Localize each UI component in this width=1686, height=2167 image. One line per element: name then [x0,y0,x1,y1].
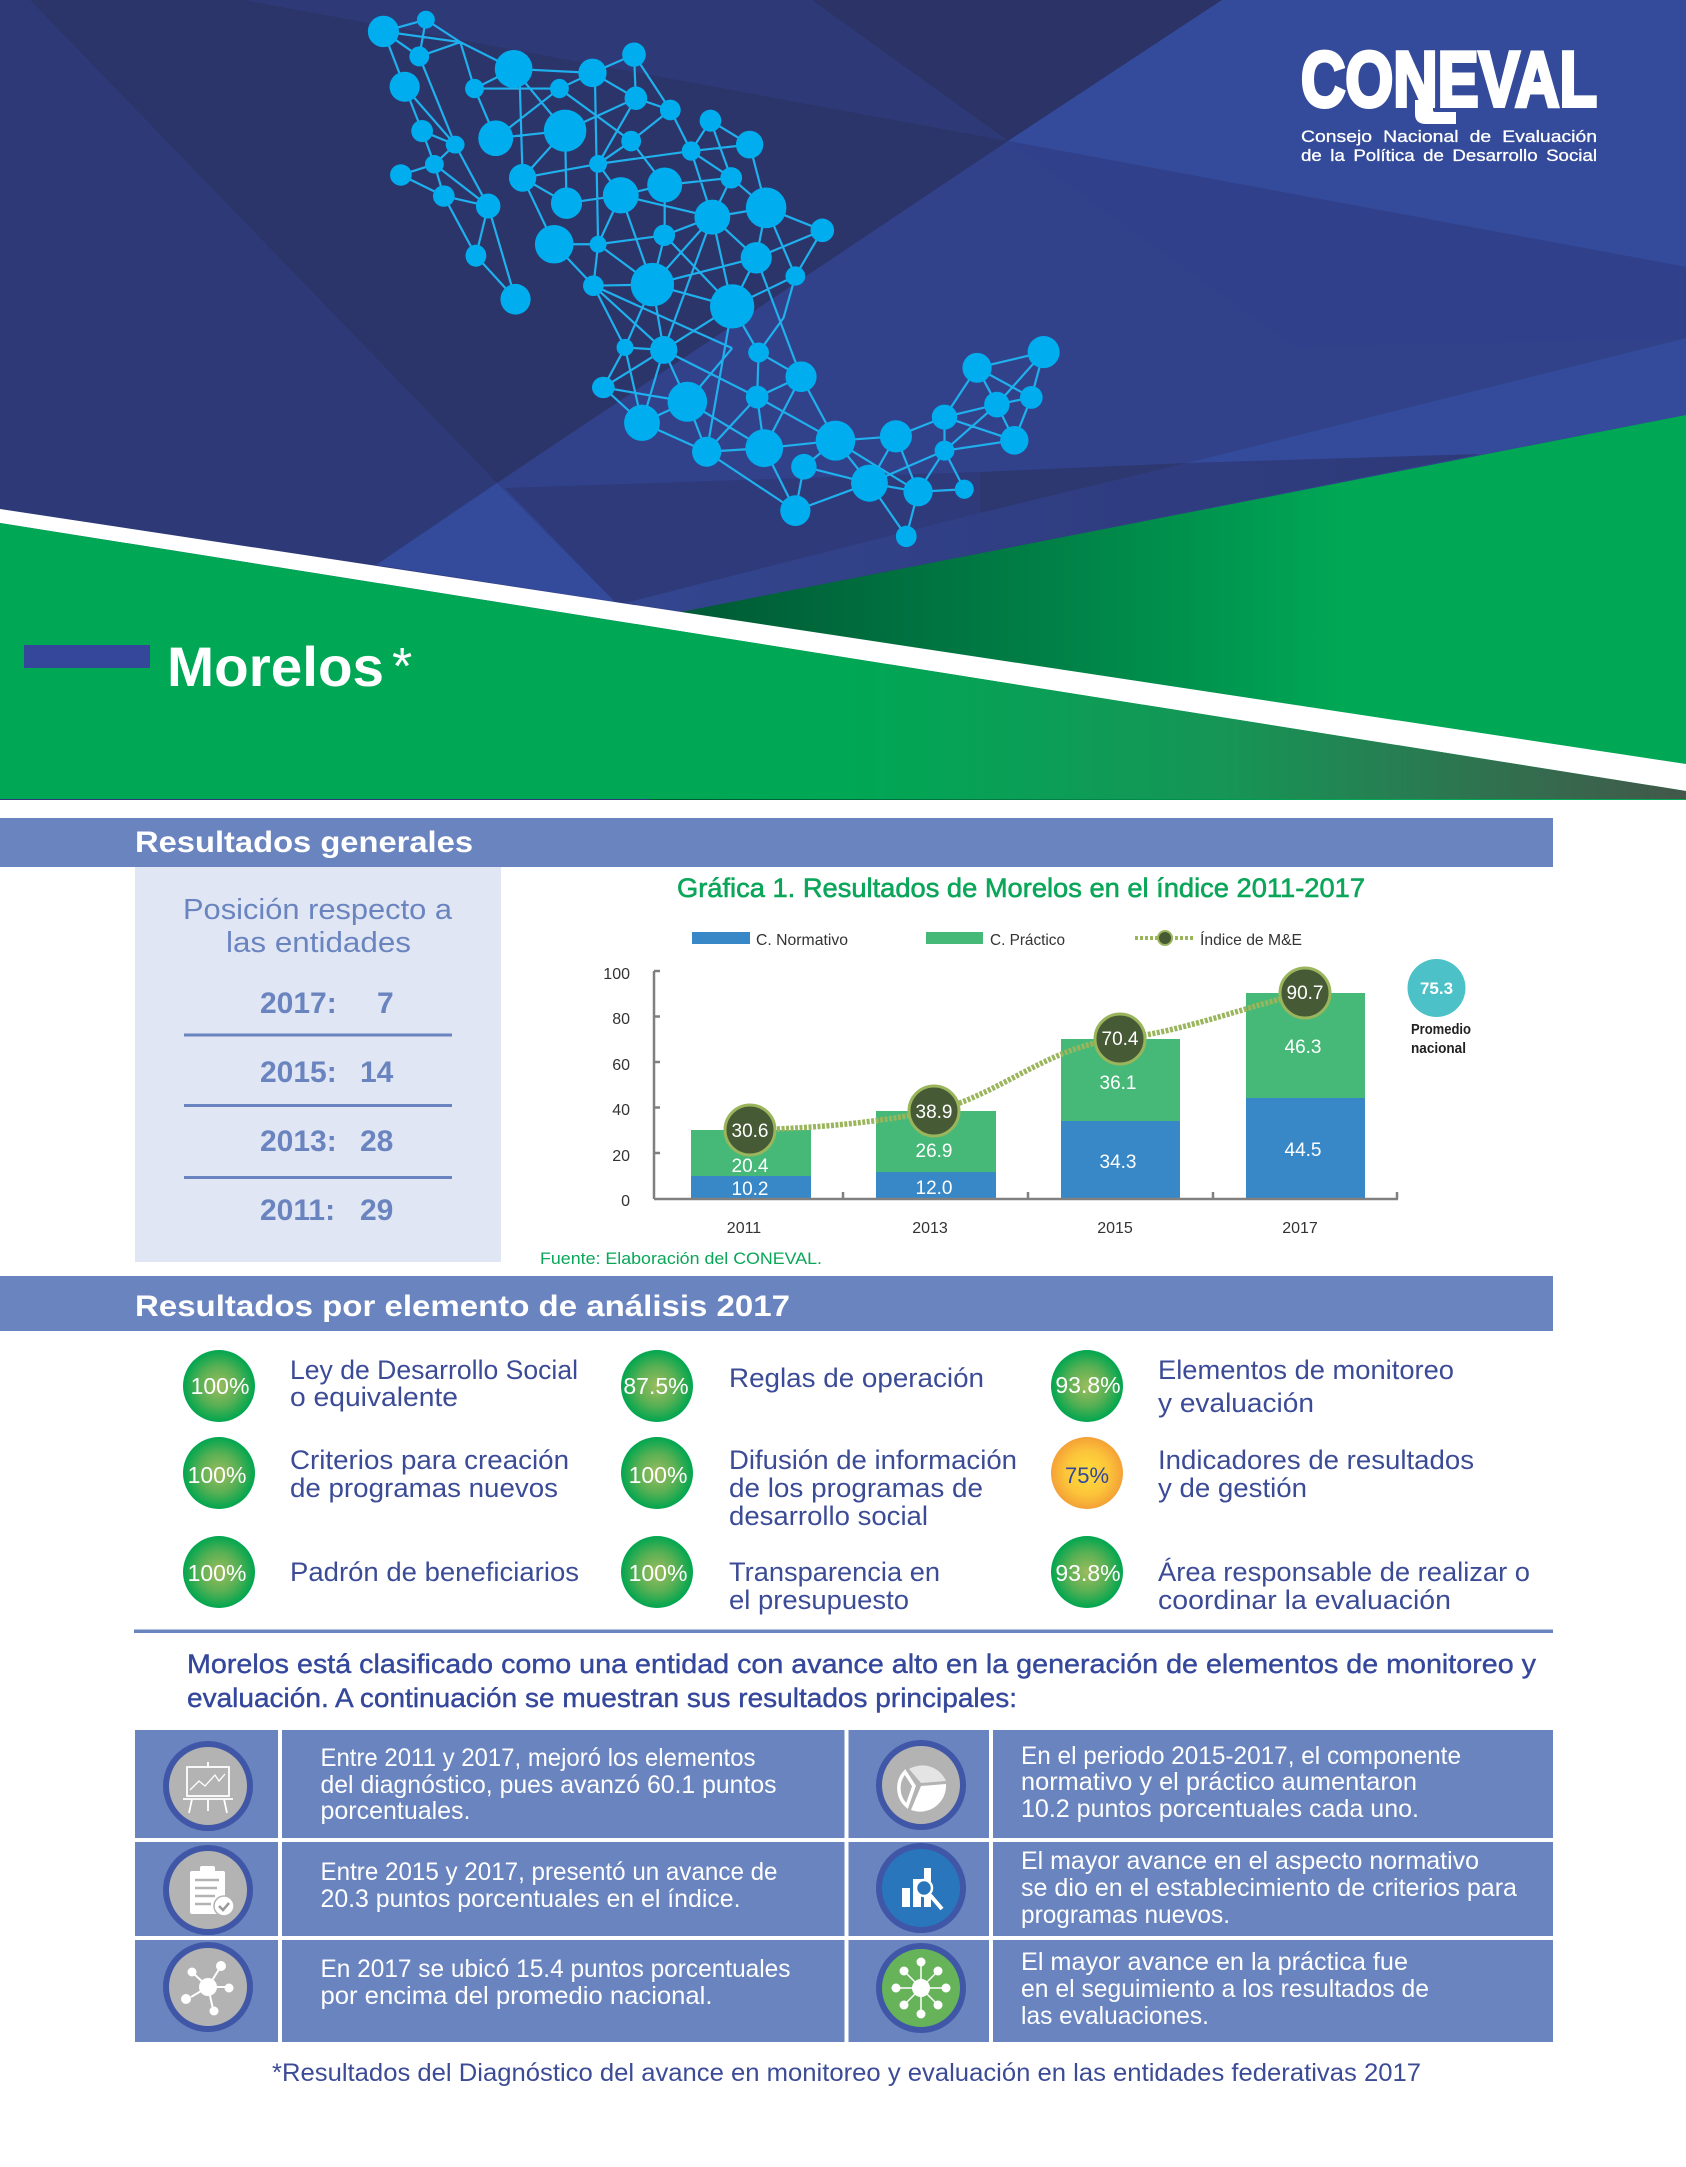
score badges: 93.8% [1055,1560,1121,1586]
chart: Resultados de Morelos 2011-2017 [540,873,1471,1268]
heading: Resultados generales [0,818,1553,867]
element labels: o equivalente [290,1382,458,1412]
score badges: 100% [629,1462,687,1488]
element labels: Transparencia en [729,1557,940,1587]
index values [732,983,1323,1142]
national average [1408,959,1471,1057]
stacked bars [691,993,1365,1198]
national average: Promedio [1411,1021,1471,1038]
CONEVAL logo [1301,35,1597,165]
source: Fuente: Elaboración del CONEVAL. [540,1249,822,1268]
bar values: 26.9 [916,1141,952,1162]
index values: 30.6 [732,1121,768,1142]
legend: C. Práctico [990,932,1065,949]
index markers [725,968,1330,1155]
CONEVAL logo: CONEVAL [1301,35,1597,123]
heading: Resultados por elemento [0,1276,1553,1331]
national average: nacional [1411,1040,1466,1057]
legend: Índice de M&E [1200,930,1302,949]
element labels: Área responsable de realizar o [1158,1557,1530,1587]
table text: programas nuevos. [1021,1901,1230,1929]
element labels: el presupuesto [729,1585,909,1615]
table text: porcentuales. [320,1797,470,1825]
axis labels: 60 [612,1057,630,1074]
bar values: 46.3 [1285,1037,1321,1058]
element labels: de programas nuevos [290,1473,558,1503]
bar values [732,1037,1321,1200]
CONEVAL logo: Consejo Nacional de Evaluación [1301,127,1597,146]
panel: ranking position: 2011: [260,1194,335,1227]
heading: Resultados generales: Resultados generales [135,826,473,859]
bar values: 12.0 [916,1178,952,1199]
element labels: Indicadores de resultados [1158,1445,1474,1475]
title: Morelos: * [392,638,412,696]
legend: C. Normativo [756,932,848,949]
panel: ranking position: 14 [360,1056,394,1089]
table text: en el seguimiento a los resultados de [1021,1975,1429,2003]
title: Morelos: Morelos [167,635,384,698]
results table [135,1730,1553,2042]
element labels [290,1355,1530,1615]
national average: 75.3 [1420,979,1453,998]
axis labels: 40 [612,1102,630,1119]
table text: por encima del promedio nacional. [320,1982,712,2010]
table text: 20.3 puntos porcentuales en el índice. [320,1885,740,1913]
icon: pie chart [879,1743,963,1827]
table text [320,1742,1517,2030]
element labels: coordinar la evaluación [1158,1585,1451,1615]
legend [692,930,1302,949]
table text: En el periodo 2015-2017, el componente [1021,1742,1461,1770]
footnote: *Resultados del Diagnóstico del avance en monitoreo y evaluación en las entidades federativas 2017 [272,2059,1421,2087]
table text: normativo y el práctico aumentaron [1021,1768,1417,1796]
axis labels: 2011 [727,1220,761,1237]
element labels: y evaluación [1158,1388,1314,1418]
network map of Mexico [368,11,1060,547]
bar values: 10.2 [732,1179,768,1200]
index values: 70.4 [1102,1029,1139,1050]
index line [750,993,1305,1130]
element labels: desarrollo social [729,1501,928,1531]
element labels: Difusión de información [729,1445,1017,1475]
bar values: 34.3 [1100,1152,1136,1173]
axis labels: 2015 [1097,1220,1133,1237]
table text: 10.2 puntos porcentuales cada uno. [1021,1795,1419,1823]
panel: ranking position: Posición respecto a [183,894,453,926]
score badges [183,1350,1123,1608]
element labels: y de gestión [1158,1473,1307,1503]
score badges: 100% [191,1373,249,1399]
table text: Entre 2011 y 2017, mejoró los elementos [320,1744,756,1772]
element labels: Elementos de monitoreo [1158,1355,1454,1385]
title: Morelos [24,635,412,698]
table text: las evaluaciones. [1021,2002,1209,2030]
chart title: Gráfica 1. Resultados de Morelos en el índice 2011-2017 [677,873,1365,903]
axis labels: 2013 [912,1220,948,1237]
score badges: 75% [1065,1463,1109,1488]
summary paragraph: evaluación. A continuación se muestran sus resultados principales: [187,1683,1017,1713]
table text: El mayor avance en el aspecto normativo [1021,1847,1479,1875]
table text: El mayor avance en la práctica fue [1021,1948,1408,1976]
table text: del diagnóstico, pues avanzó 60.1 puntos [320,1771,776,1799]
axis labels: 100 [603,966,630,983]
bar values: 44.5 [1285,1140,1321,1161]
element labels: Padrón de beneficiarios [290,1557,579,1587]
score badges: 100% [188,1462,246,1488]
score badges: 87.5% [623,1373,689,1399]
heading: Resultados por elemento: Resultados por elemento de análisis 2017 [135,1290,790,1323]
panel: ranking position: 2015: [260,1056,337,1089]
axis labels [603,966,1318,1237]
icon: network hub [166,1945,250,2029]
score badges: 93.8% [1055,1372,1121,1398]
icon: green hub [879,1946,963,2030]
icon: presentation board [166,1744,250,1828]
element labels: Criterios para creación [290,1445,569,1475]
index values: 90.7 [1287,983,1323,1004]
CONEVAL logo: de la Política de Desarrollo Social [1301,146,1597,165]
panel: ranking position: 2013: [260,1125,337,1158]
index values: 38.9 [916,1102,952,1123]
summary paragraph: Morelos está clasificado como una entidad con avance alto en la generación de elementos de monitoreo y [187,1649,1537,1679]
axis labels: 0 [621,1193,630,1210]
element labels: de los programas de [729,1473,983,1503]
panel: ranking position: 2017: [260,987,337,1020]
icon: clipboard checklist [166,1848,250,1932]
axis labels: 2017 [1282,1220,1318,1237]
panel: ranking position: 29 [360,1194,393,1227]
score badges: 100% [629,1560,687,1586]
hero background [0,0,1686,800]
element labels: Ley de Desarrollo Social [290,1355,578,1385]
panel: ranking position: las entidades [226,927,411,959]
bar values: 36.1 [1100,1073,1136,1094]
table text: se dio en el establecimiento de criterios para [1021,1874,1517,1902]
panel: ranking position: 28 [360,1125,393,1158]
icon: bars and magnifier [879,1846,963,1930]
score badges: 100% [188,1560,246,1586]
table text: En 2017 se ubicó 15.4 puntos porcentuales [320,1955,790,1983]
table text: Entre 2015 y 2017, presentó un avance de [320,1858,778,1886]
panel: ranking position: 7 [377,987,394,1020]
bar values: 20.4 [732,1156,769,1177]
panel: ranking position [135,867,501,1262]
axes [654,971,1398,1199]
axis labels: 80 [612,1011,630,1028]
element labels: Reglas de operación [729,1363,984,1393]
summary paragraph [187,1649,1537,1713]
axis labels: 20 [612,1148,630,1165]
